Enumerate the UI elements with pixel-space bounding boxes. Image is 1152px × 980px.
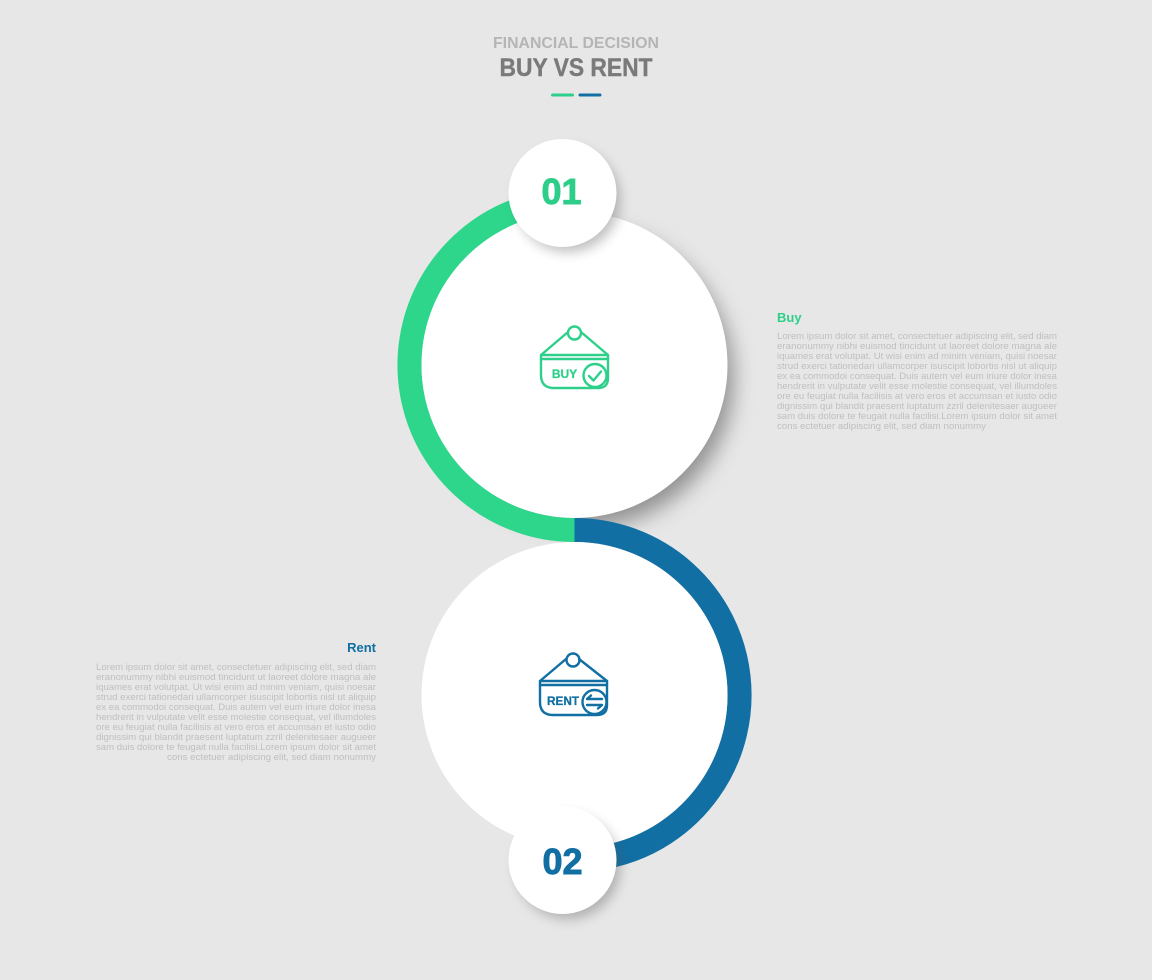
arc: blue ring [574, 530, 740, 856]
body: rent: ore eu feugiat nulla facilisis at vero eros et accumsan et iusto odio [96, 722, 376, 733]
panel: bottom circle [422, 542, 728, 848]
body: buy: eranonummy nibhi euismod tincidunt ut laoreet dolore magna ale [777, 341, 1057, 352]
body: buy: Lorem ipsum dolor sit amet, consectetuer adipiscing elit, sed diam [777, 331, 1057, 342]
text block: buy [777, 310, 1058, 432]
panel: top circle [422, 212, 728, 518]
body: rent: iquames erat volutpat. Ut wisi enim ad minim veniam, quisi noesar [96, 682, 377, 693]
body: rent [96, 662, 377, 763]
badge: 01 [508, 139, 620, 252]
body: buy: sam duis dolore te feugait nulla facilisi.Lorem ipsum dolor sit amet [777, 411, 1057, 422]
arc: green ring [409, 211, 574, 530]
icon: rent tag: RENT [547, 694, 580, 708]
body: rent: Lorem ipsum dolor sit amet, consectetuer adipiscing elit, sed diam [96, 662, 376, 673]
subtitle: financial decision: FINANCIAL DECISION [493, 35, 659, 52]
body: rent: cons ectetuer adipiscing elit, sed diam nonummy [167, 752, 376, 763]
body: rent: ex ea commodoi consequat. Duis autem vel eum iriure dolor inesa [96, 702, 377, 713]
heading: buy vs rent: BUY VS RENT [500, 54, 652, 82]
text block: rent [96, 640, 377, 763]
body: buy: ore eu feugiat nulla facilisis at vero eros et accumsan et iusto odio [777, 391, 1057, 402]
badge: 01: 01 [541, 171, 582, 212]
body: buy: ex ea commodoi consequat. Duis autem vel eum iriure dolor inesa [777, 371, 1058, 382]
body: rent: eranonummy nibhi euismod tincidunt ut laoreet dolore magna ale [96, 672, 376, 683]
icon: buy tag: BUY [552, 367, 577, 381]
body: buy: dignissim qui blandit praesent luptatum zzril delenitesaer augueer [777, 401, 1058, 412]
body: rent: dignissim qui blandit praesent luptatum zzril delenitesaer augueer [96, 732, 377, 743]
icon: buy tag [541, 326, 608, 388]
heading: rent: Rent [347, 640, 377, 655]
icon: rent tag [540, 654, 607, 715]
body: buy [777, 331, 1058, 432]
body: buy: cons ectetuer adipiscing elit, sed diam nonummy [777, 421, 986, 432]
body: rent: sam duis dolore te feugait nulla facilisi.Lorem ipsum dolor sit amet [96, 742, 376, 753]
body: buy: hendrerit in vulputate velit esse molestie consequat, vel illumdoles [777, 381, 1057, 392]
badge: 02: 02 [542, 841, 583, 882]
title accent dashes [551, 94, 602, 96]
shadow: top circle [433, 228, 733, 528]
badge: 02 [508, 806, 620, 919]
heading: buy: Buy [777, 310, 802, 325]
title [493, 35, 659, 82]
body: rent: hendrerit in vulputate velit esse molestie consequat, vel illumdoles [96, 712, 376, 723]
body: buy: iquames erat volutpat. Ut wisi enim ad minim veniam, quisi noesar [777, 351, 1058, 362]
body: rent: strud exerci tationedari ullamcorper isuscipit lobortis nisl ut aliquip [96, 692, 376, 703]
body: buy: strud exerci tationedari ullamcorper isuscipit lobortis nisl ut aliquip [777, 361, 1057, 372]
